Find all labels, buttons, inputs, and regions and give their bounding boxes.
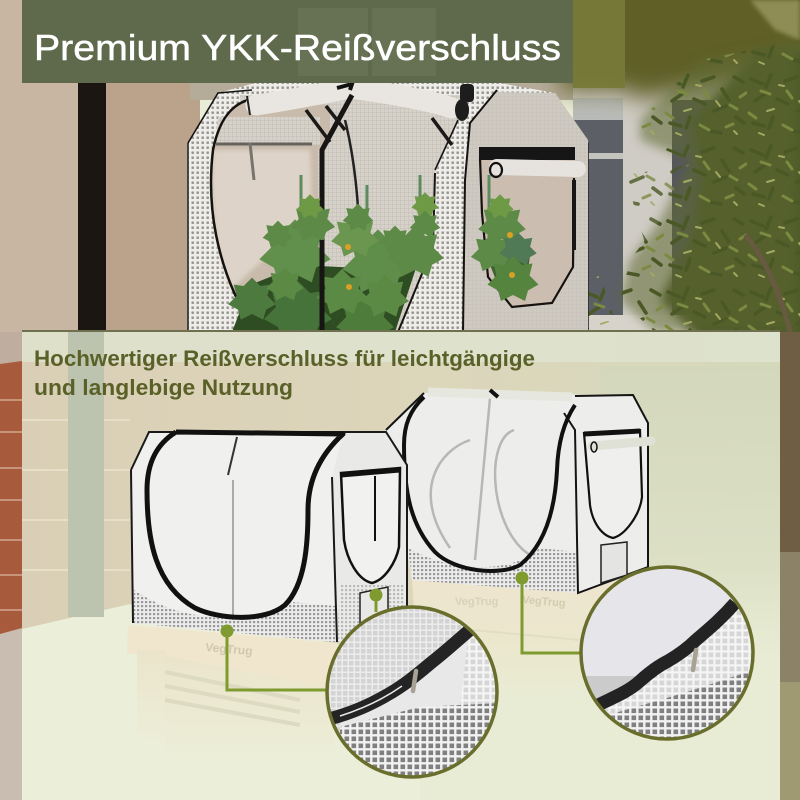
back greenhouse	[386, 390, 651, 593]
right side panel	[463, 92, 588, 332]
title banner	[22, 0, 573, 83]
top roll	[256, 88, 452, 108]
outer strips: brick wall left, tree trunk right	[0, 332, 800, 800]
faded wall background	[22, 332, 780, 800]
front door zipper	[147, 432, 343, 617]
heading: Hochwertiger Reißverschluss für leichtgängige	[34, 346, 535, 371]
title text: Premium YKK-Reißverschluss	[34, 27, 561, 68]
background windows and olive tree	[560, 0, 800, 340]
left door opening	[212, 102, 330, 294]
back raised bed	[412, 566, 648, 700]
callout circle: zipper detail right	[578, 565, 760, 745]
background photo: greenhouse on patio	[0, 0, 800, 346]
front door zipper	[404, 397, 575, 571]
front raised bed	[127, 625, 337, 760]
front greenhouse	[131, 432, 407, 642]
greenhouse body	[188, 83, 588, 332]
side door	[341, 468, 400, 583]
heading	[34, 346, 535, 400]
side door	[481, 160, 574, 306]
support poles	[320, 94, 354, 240]
cucumber plants	[228, 175, 538, 346]
side door	[584, 430, 642, 538]
front raised bed: VegTrug	[205, 640, 253, 658]
roll bar	[428, 392, 572, 397]
callout circle: zipper detail left	[325, 605, 500, 780]
back raised bed: VegTrug	[455, 596, 498, 608]
back raised bed: VegTrug	[522, 594, 566, 610]
callout connector: left	[220, 588, 382, 690]
content panel	[22, 330, 780, 800]
heading: und langlebige Nutzung	[34, 375, 293, 400]
middle interior	[240, 95, 470, 332]
callout connector: right	[516, 572, 583, 653]
wall and downpipe	[0, 0, 590, 332]
